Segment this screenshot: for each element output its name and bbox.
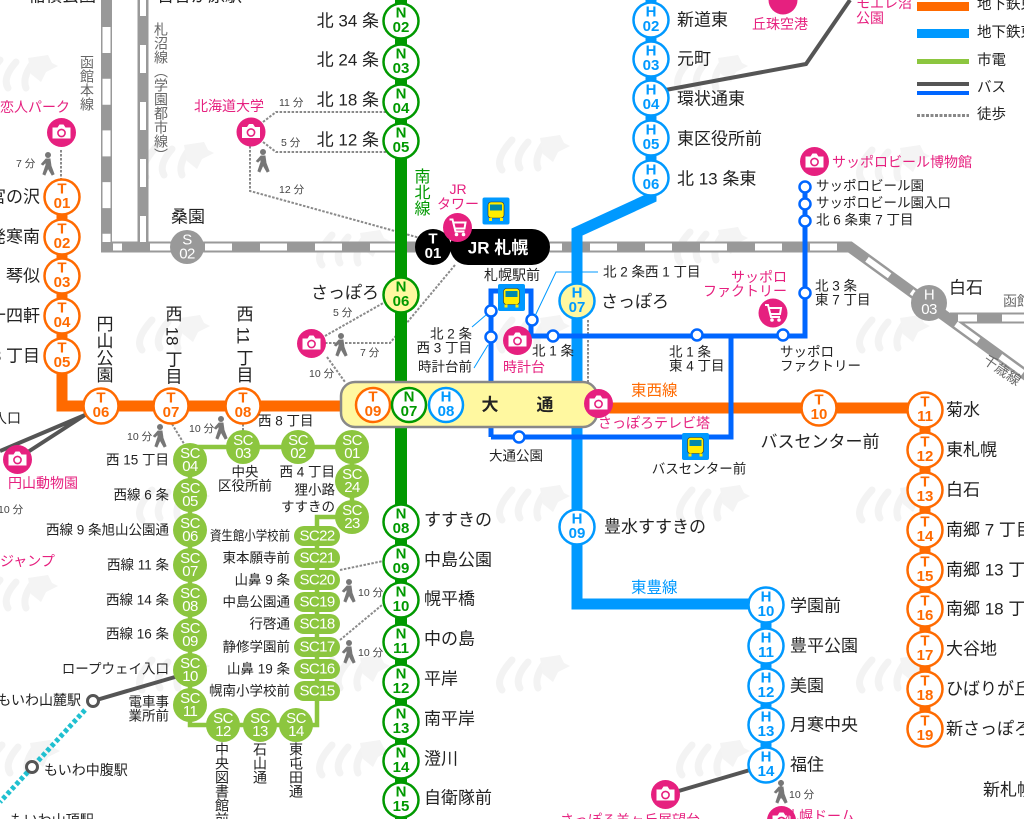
tram station names: 資生館小学校前 — [210, 528, 290, 544]
Namboku stations: 10 — [393, 598, 409, 615]
tram stations: 14 — [288, 723, 304, 740]
JR line labels: 函館本線 — [79, 55, 95, 111]
tram stations: SC — [233, 432, 254, 449]
Odori station panel: T — [368, 388, 378, 406]
Tozai stations: T — [814, 392, 824, 408]
Okadama airport pin — [752, 0, 808, 32]
Namboku station names: 北 12 条 — [317, 130, 379, 150]
Sapporo factory pin: サッポロ — [731, 269, 787, 285]
walk icons near tram: 10 分 — [189, 423, 215, 435]
Tozai stations: 08 — [235, 404, 251, 421]
bus stop names: 北 6 条東 7 丁目 — [816, 212, 914, 228]
Tozai stations: 11 — [917, 408, 933, 425]
Toho station names — [601, 10, 858, 774]
JR stations: S02 and H03: 02 — [179, 246, 195, 262]
tram station names: 西 4 丁目 — [279, 464, 335, 480]
Tozai stations: T — [57, 340, 67, 356]
Moerenuma park label — [856, 0, 912, 26]
tram station names: 中央 — [232, 464, 259, 480]
bus stop names: 北 2 条 — [430, 326, 472, 342]
Toho stations: 02 — [643, 18, 659, 35]
tram station names: 電車事 — [128, 694, 169, 710]
Tozai station names: 白石 — [946, 480, 980, 500]
Okadama airport pin: 丘珠空港 — [752, 16, 808, 32]
JR line labels: 千歳線 — [980, 351, 1024, 389]
Toho station names: 元町 — [677, 50, 711, 68]
JR line labels: 札沼線（学園都市線） — [153, 22, 169, 162]
tram station names: 西線 6 条 — [113, 486, 169, 502]
tram stations: SC15 — [299, 682, 335, 700]
Toho stations: H — [572, 284, 582, 302]
Namboku station names: 幌平橋 — [424, 590, 475, 608]
tram station names: 行啓通 — [250, 616, 290, 632]
Tozai stations: 19 — [917, 727, 933, 744]
Toho stations: H — [761, 588, 771, 606]
Tozai stations: T — [57, 260, 67, 276]
TV tower pin: さっぽろテレビ塔 — [598, 415, 710, 431]
bus stop names: バスセンター前 — [652, 460, 746, 476]
tram stations: 11 — [183, 703, 197, 720]
Namboku stations — [384, 4, 418, 818]
ropeway — [0, 710, 85, 802]
tram stations: 06 — [182, 528, 198, 545]
Hokkaido University pin: 5 分 — [281, 137, 301, 149]
tram stations: SC — [180, 690, 201, 707]
Odori station panel: 07 — [401, 403, 417, 420]
Toho stations: H — [646, 162, 656, 178]
Toho stations: H — [572, 510, 582, 528]
Tozai station names: 琴似 — [6, 266, 40, 286]
Tozai stations: 03 — [54, 274, 70, 291]
Namboku station names: 北 24 条 — [317, 50, 379, 70]
Toho station names: 美園 — [790, 676, 824, 696]
tram stations — [173, 430, 369, 742]
legend: 市電 — [977, 52, 1006, 69]
Namboku station names: 中の島 — [424, 630, 475, 648]
JR stations: S02 and H03: 桑園 — [171, 208, 205, 226]
Namboku station names: 北 34 条 — [317, 12, 379, 30]
Namboku stations: 13 — [393, 720, 409, 737]
tram station names: すすきの — [281, 500, 335, 514]
tram station names: 西線 11 条 — [107, 556, 169, 572]
Toho station names: 福住 — [790, 756, 824, 774]
tram station names: 山鼻 9 条 — [234, 572, 290, 588]
legend: バス — [977, 80, 1006, 96]
Toho station names: 環状通東 — [677, 90, 745, 108]
Odori station panel: 通 — [536, 396, 554, 414]
Namboku stations: 05 — [393, 139, 409, 156]
tram stations: SC — [286, 710, 307, 727]
tram station names: 狸小路 — [294, 482, 335, 498]
Tozai stations: 07 — [163, 404, 179, 421]
tram stations: SC — [180, 515, 201, 532]
Tozai stations: 15 — [917, 568, 933, 585]
Tozai stations: 13 — [917, 488, 933, 505]
Toho station names: 豊平公園 — [790, 636, 858, 656]
Tozai station names: バスセンター前 — [760, 432, 880, 452]
Toho stations: 06 — [643, 176, 659, 193]
koibito park pin: 7 分 — [16, 158, 36, 170]
Tozai stations: T — [920, 712, 930, 730]
Tozai stations: 12 — [917, 448, 933, 465]
line name labels: 南北線 — [412, 168, 430, 216]
Namboku stations: N — [396, 46, 406, 62]
Namboku station names: 澄川 — [424, 750, 458, 768]
JR line labels — [79, 22, 1024, 389]
Odori station panel: 大 — [482, 396, 498, 414]
bus stop names: 北 2 条西 1 丁目 — [603, 264, 701, 280]
JR lines — [106, 0, 1024, 378]
bus stop names: サッポロビール園入口 — [816, 196, 951, 210]
Tozai stations: T — [238, 390, 248, 406]
tram stations: 07 — [182, 563, 198, 580]
Toho station names: 北 13 条東 — [677, 170, 756, 188]
Namboku station names — [311, 12, 492, 808]
tram stations: 08 — [182, 598, 198, 615]
tram stations: SC17 — [299, 638, 335, 656]
clock tower pin — [503, 326, 545, 375]
tram station names: 山鼻 19 条 — [227, 660, 290, 676]
tram stations: 01 — [344, 445, 360, 462]
Namboku station names: 北 18 条 — [317, 90, 379, 110]
tram stations: SC — [250, 710, 271, 727]
subway Toho line — [577, 0, 766, 780]
tram stations: SC — [180, 620, 201, 637]
ski jump label: ジャンプ — [0, 553, 55, 569]
tram stations: SC16 — [299, 660, 335, 678]
tram stations: 02 — [290, 445, 306, 462]
tram stations: SC21 — [299, 550, 335, 566]
Namboku stations: 03 — [393, 60, 409, 77]
JR Sapporo station: JR 札幌 — [468, 238, 528, 258]
Toho stations: 11 — [758, 644, 774, 661]
line name labels — [412, 168, 678, 596]
Namboku stations: N — [396, 784, 406, 800]
JR stations: S02 and H03: S — [182, 232, 192, 248]
Moiwa ropeway stations — [0, 692, 128, 819]
bus stop names: ファクトリー — [780, 358, 861, 374]
Namboku station names: さっぽろ — [311, 284, 379, 302]
tram stations: SC — [288, 432, 309, 449]
Sapporo factory pin: ファクトリー — [703, 283, 787, 299]
tram stations: SC — [180, 550, 201, 567]
Toho station names: 月寒中央 — [790, 716, 858, 734]
walk icons near tram: 10 分 — [127, 431, 153, 443]
Tozai stations: 02 — [54, 235, 70, 252]
tram station names: ロープウェイ入口 — [62, 662, 169, 676]
tram station names: 東屯田通 — [288, 742, 304, 799]
Namboku stations: 14 — [393, 759, 410, 776]
tram stations: SC — [180, 655, 201, 672]
tram stations: SC18 — [299, 616, 335, 632]
Toho stations: 13 — [758, 723, 774, 740]
Tozai station names: 西 11 丁目 — [234, 305, 252, 383]
Tozai stations: T — [920, 514, 930, 530]
tram stations: 05 — [182, 493, 198, 510]
bus stop names: 西 3 丁目 — [416, 340, 472, 356]
Odori station panel: 09 — [365, 403, 381, 420]
Namboku stations: 11 — [393, 640, 409, 657]
top clipped labels — [28, 0, 242, 6]
Namboku stations: 08 — [393, 520, 409, 537]
Tozai stations: 18 — [917, 687, 933, 704]
Tozai station names: 西 18 丁目 — [162, 305, 182, 384]
bus stop names: 東 7 丁目 — [815, 292, 871, 308]
Odori station panel — [341, 382, 597, 427]
Toho stations: H — [761, 630, 771, 646]
Maruyama zoo: 円山動物園 — [8, 475, 78, 491]
Tozai stations: 06 — [93, 404, 109, 421]
Namboku station names: 中島公園 — [424, 550, 492, 570]
JR stations: S02 and H03 — [170, 208, 983, 321]
walk icons near tram — [127, 416, 384, 663]
Namboku stations: N — [396, 278, 406, 296]
Namboku stations: N — [396, 744, 406, 762]
bus leader lines — [472, 272, 598, 368]
Namboku stations: 04 — [393, 100, 410, 117]
bus lines: blue — [491, 187, 805, 437]
Toho stations: H — [761, 708, 771, 726]
Tozai stations: T — [920, 394, 930, 410]
Sapporo walking pin: 10 分 — [309, 368, 335, 380]
tram station names: 区役所前 — [218, 478, 272, 494]
Sapporo beer museum pin — [800, 147, 972, 176]
Toho stations: H — [761, 748, 771, 766]
line name labels: 東豊線 — [631, 578, 678, 596]
JR stations: S02 and H03: 03 — [921, 301, 937, 318]
Sapporo dome and Hitsujigaoka: 10 分 — [789, 789, 815, 801]
Tozai stations: T — [920, 434, 930, 450]
Maruyama zoo — [0, 445, 78, 516]
tram station names: 西 15 丁目 — [106, 452, 169, 468]
tram station names — [46, 414, 335, 819]
JR Sapporo station: JR — [449, 181, 467, 197]
bus stop names: 時計台前 — [418, 358, 472, 374]
JR Sapporo station — [415, 181, 550, 265]
tram station names: 幌南小学校前 — [209, 682, 290, 698]
Tozai station names: 東札幌 — [946, 440, 997, 460]
Namboku stations: N — [396, 706, 406, 722]
Namboku stations: 09 — [393, 560, 409, 577]
Sapporo walking pin — [297, 307, 380, 380]
bus stop names: サッポロ — [780, 344, 834, 360]
tram stations: SC19 — [299, 594, 335, 610]
tram stations: SC — [180, 445, 201, 462]
Toho stations: 07 — [569, 299, 585, 316]
Tozai stations: 17 — [917, 647, 933, 664]
Sapporo walking pin: 5 分 — [333, 307, 353, 319]
Tozai stations: T — [57, 180, 67, 198]
Toho stations: 04 — [643, 96, 660, 113]
Toho stations: H — [646, 82, 656, 98]
Toho station names: 東区役所前 — [677, 130, 762, 148]
Tozai stations: T — [920, 474, 930, 490]
Tozai stations: 10 — [811, 406, 827, 423]
Odori station panel: H — [441, 388, 451, 406]
line name labels: 東西線 — [631, 382, 678, 400]
Moerenuma park label: 公園 — [856, 10, 884, 26]
Toho station names: 新道東 — [677, 10, 728, 30]
bus stop names: 東 4 丁目 — [669, 358, 725, 374]
tram station names: 静修学園前 — [222, 638, 290, 654]
Namboku stations: N — [396, 506, 406, 522]
Toho stations: H — [646, 4, 656, 20]
Tozai station names: 大谷地 — [946, 640, 997, 658]
Toho stations: 03 — [643, 57, 659, 74]
Namboku station names: 自衛隊前 — [424, 788, 492, 808]
JR stations: S02 and H03: 白石 — [949, 278, 983, 298]
bus stop names: 北 1 条 — [532, 342, 574, 358]
Tozai stations: 14 — [917, 528, 934, 545]
tram stations: 09 — [182, 633, 198, 650]
legend — [917, 0, 1024, 123]
tram stations: 03 — [235, 445, 251, 462]
tram stations: 12 — [215, 723, 231, 740]
tram stations: SC — [180, 480, 201, 497]
tram station names: 業所前 — [128, 708, 169, 724]
tram station names: 石山通 — [252, 742, 268, 785]
Tozai stations: 01 — [54, 195, 70, 212]
Moiwa ropeway stations: もいわ中腹駅 — [44, 762, 128, 778]
Hokkaido University pin — [194, 97, 305, 196]
tram stations: SC — [213, 710, 234, 727]
Tozai stations: T — [166, 390, 176, 406]
tram stations: SC — [342, 432, 363, 449]
tram station names: 西線 16 条 — [106, 626, 169, 642]
bus stop names: 北 1 条 — [669, 344, 711, 360]
Tozai stations: T — [57, 220, 67, 238]
Tozai stations: T — [920, 554, 930, 570]
Toho stations: 05 — [643, 136, 659, 153]
subway Namboku line — [395, 0, 407, 819]
tram stations: 10 — [182, 668, 198, 685]
tram station names: 西線 9 条旭山公園通 — [46, 522, 169, 538]
koibito park pin — [0, 99, 76, 175]
tram station names: 東本願寺前 — [222, 550, 290, 566]
Toho stations — [560, 2, 784, 782]
tram stations: SC20 — [299, 572, 335, 588]
tram stations: 24 — [344, 479, 360, 496]
subway Tozai line — [62, 180, 925, 730]
JR Sapporo station: タワー — [437, 196, 479, 212]
Tozai stations: 16 — [917, 607, 933, 624]
Namboku stations: 06 — [393, 293, 409, 310]
Tozai station names: 円山公園 — [94, 315, 113, 383]
Namboku stations: N — [396, 626, 406, 642]
tram station names: 西線 14 条 — [106, 592, 169, 608]
background watermarks — [0, 55, 930, 775]
Namboku stations: N — [396, 584, 406, 600]
bus stops — [486, 182, 810, 442]
tram stations: SC — [342, 502, 363, 519]
Sapporo Ekimae bus stop: 札幌駅前 — [484, 267, 540, 283]
JR stations: S02 and H03: H — [924, 286, 934, 304]
Namboku stations: N — [396, 86, 406, 102]
Toho stations: 12 — [758, 684, 774, 701]
Sapporo factory pin — [703, 269, 788, 328]
Toho stations: 10 — [758, 603, 774, 620]
Tozai stations: T — [96, 390, 106, 406]
Namboku stations: 02 — [393, 19, 409, 36]
Tozai stations: T — [920, 592, 930, 610]
Toho stations: H — [646, 122, 656, 138]
tram stations: SC — [342, 466, 363, 483]
Toho stations: H — [646, 42, 656, 60]
Sapporo walking pin: 7 分 — [360, 347, 380, 359]
tram line — [190, 447, 352, 725]
Tozai station names: 菊水 — [946, 400, 980, 420]
walk icons near tram: 10 分 — [358, 587, 384, 599]
walk icons near tram: 10 分 — [358, 647, 384, 659]
Toho stations: 14 — [758, 763, 775, 780]
Sapporo dome and Hitsujigaoka — [560, 780, 855, 819]
Odori station panel: 08 — [438, 403, 454, 420]
legend: 徒歩 — [977, 106, 1006, 123]
Namboku station names: 平岸 — [424, 670, 458, 688]
Odori station panel: N — [404, 388, 414, 406]
Tozai stations — [44, 180, 942, 746]
bus stop names: 大通公園 — [489, 448, 543, 464]
Namboku stations: N — [396, 124, 406, 142]
Toho station names: 豊水すすきの — [604, 518, 706, 536]
bus stop names — [416, 178, 951, 476]
Bus center bus icon — [682, 433, 709, 460]
Hokkaido University pin: 12 分 — [279, 184, 305, 196]
Tozai station names — [0, 188, 1024, 800]
Sapporo Ekimae bus stop — [484, 267, 540, 311]
Hokkaido University pin: 11 分 — [279, 97, 304, 109]
tram stations: SC — [180, 585, 201, 602]
Toho stations: 09 — [569, 525, 585, 542]
tram stations: SC22 — [299, 528, 335, 544]
Tozai stations: T — [920, 672, 930, 690]
Tozai stations: T — [57, 300, 67, 316]
tram station names: 中島公園通 — [222, 594, 290, 610]
Tozai stations: 04 — [54, 314, 71, 331]
Sapporo beer museum pin: サッポロビール博物館 — [832, 154, 972, 170]
walking routes — [61, 112, 781, 800]
bus stop names: サッポロビール園 — [816, 178, 924, 194]
Toho station names: 学園前 — [790, 596, 841, 616]
Namboku station names: すすきの — [424, 510, 492, 530]
Toho stations: H — [761, 670, 771, 686]
Namboku stations: N — [396, 666, 406, 682]
tram stations: 13 — [252, 723, 268, 740]
Namboku stations: 12 — [393, 680, 409, 697]
JR Sapporo station: T — [428, 230, 438, 248]
Tozai stations: T — [920, 632, 930, 650]
tram stations: 04 — [182, 458, 198, 475]
tram stations: 23 — [344, 515, 360, 532]
Toho station names: さっぽろ — [601, 292, 669, 312]
bus stop names: 北 3 条 — [815, 278, 857, 294]
Namboku stations: 15 — [393, 798, 409, 815]
TV tower pin — [584, 389, 710, 431]
tram station names: 西 8 丁目 — [258, 414, 314, 428]
Namboku stations: N — [396, 546, 406, 562]
Hokkaido University pin: 北海道大学 — [194, 98, 264, 114]
Namboku station names: 南平岸 — [424, 710, 475, 728]
clock tower pin: 時計台 — [503, 359, 545, 375]
JR Sapporo station: 01 — [425, 245, 441, 262]
Tozai stations: 05 — [54, 354, 70, 371]
Namboku stations: N — [396, 4, 406, 22]
